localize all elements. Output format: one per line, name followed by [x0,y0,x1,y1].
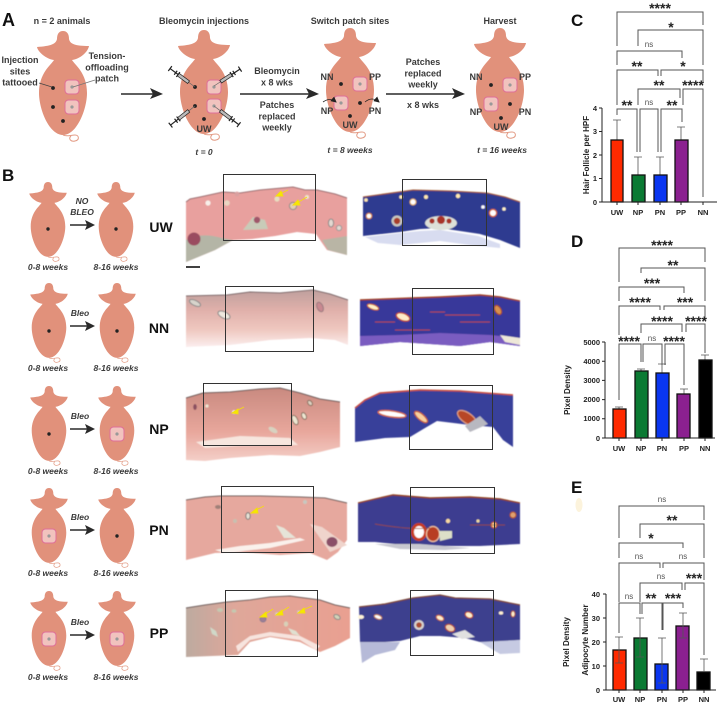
significance brackets: ns [657,572,665,581]
significance brackets: * [648,530,654,546]
animal 4 at harvest [474,28,526,138]
row PP schematic [28,591,139,682]
significance brackets: * [680,58,686,74]
y tick labels [583,338,600,443]
panel B: treatment groups and histology [2,166,520,682]
row label NN: NN [149,320,169,336]
label: patches replaced weekly: weekly [407,80,438,90]
yellow arrow PN [251,506,264,513]
field box [410,386,492,450]
x labels: UW [611,208,624,217]
label: t = 0: t = 0 [195,147,213,157]
yellow arrows UW [276,190,307,205]
y tick labels: 4 [593,104,598,113]
label: tension-offloading patch: offloading [85,62,129,72]
arrow: to injections [121,93,157,95]
label: patches replaced weekly: weekly [261,123,292,133]
x labels [613,695,709,703]
significance brackets: ** [646,590,657,606]
site labels at t = 16 weeks [470,72,531,132]
error bars [615,355,709,409]
y axis title: Hair Follicle per HPF [582,116,591,194]
field box [226,590,318,656]
y tick labels: 10 [592,662,600,671]
y tick labels: 5000 [583,338,600,347]
histology NP trichrome [355,390,513,447]
row label UW: UW [149,219,173,235]
label: patches replaced weekly: replaced [258,111,296,121]
y tick labels: 1000 [583,414,600,423]
field box [226,286,314,352]
y tick labels [593,104,598,207]
histology PP H&E [186,596,350,657]
significance brackets: **** [685,313,707,329]
site labels at t = 8 weeks: PN [369,106,381,116]
field box [412,288,494,354]
bars [613,626,710,690]
significance brackets: **** [649,0,671,16]
significance brackets: ns [635,552,643,561]
x labels: PN [657,444,667,453]
significance brackets: **** [629,294,651,310]
arrow: bleomycin weeks [240,93,312,95]
significance brackets: *** [686,570,703,586]
row UW schematic: NO [76,196,89,206]
significance brackets: * [668,19,674,35]
panel letter A: A [2,10,15,30]
x labels [613,444,710,453]
site labels at t = 8 weeks [320,72,381,130]
site labels at t = 16 weeks: NP [470,107,482,117]
significance brackets: **** [663,333,685,349]
row PN schematic [28,488,139,578]
y tick labels: 20 [592,638,600,647]
y tick labels: 30 [592,614,600,623]
significance brackets: ns [645,98,653,107]
row label NP: NP [149,421,169,437]
site labels at t = 8 weeks: UW [342,120,358,130]
label: t = 8 weeks: t = 8 weeks [327,145,373,155]
row PN schematic: 8-16 weeks [94,568,139,578]
histology PP trichrome [358,595,520,663]
panel E: adipocyte number bar chart [562,478,716,703]
y axis title: Pixel Density [563,365,572,415]
row UW schematic [28,182,139,272]
significance brackets: ns [658,495,666,504]
x labels: NP [636,444,646,453]
x labels: PP [676,208,686,217]
x labels [611,208,708,217]
significance brackets: *** [665,590,682,606]
row NP schematic: Bleo [71,411,89,421]
x labels: PP [679,444,689,453]
significance brackets: **** [651,237,673,253]
label: bleomycin x 8 wks: x 8 wks [261,77,293,87]
y tick labels: 0 [593,198,597,207]
histology NN trichrome [360,295,520,346]
label: injection sites tattooed: sites [10,66,30,76]
yellow arrows PP [260,606,312,617]
histology NN H&E [186,290,348,347]
y tick labels: 4000 [583,357,600,366]
row PN schematic: 0-8 weeks [28,568,68,578]
site labels at t = 8 weeks: PP [369,72,381,82]
significance brackets: ** [667,97,678,113]
axes and ticks [603,594,716,693]
row PN schematic: Bleo [71,512,89,522]
panel letter C: C [571,11,583,30]
field box [410,590,494,656]
label: injection sites tattooed: tattooed [2,78,38,88]
row UW schematic: 8-16 weeks [94,262,139,272]
panel letter E: E [571,478,582,497]
histology UW H&E [186,187,347,262]
error bars [613,120,685,175]
site labels at t = 8 weeks: NP [321,106,333,116]
y tick labels: 0 [596,434,600,443]
label: patches replaced weekly: Patches [406,57,440,67]
significance brackets: ns [645,40,653,49]
y axis title 1: Pixel Density [562,617,571,667]
site labels at t = 16 weeks: UW [494,122,509,132]
heading: Bleomycin injections: Bleomycin injections [159,16,249,26]
row PP schematic: Bleo [71,617,89,627]
arrow: to harvest [386,93,458,95]
y tick labels: 3000 [583,376,600,385]
bars [613,360,712,438]
significance brackets: ** [667,512,678,528]
x labels: NN [698,208,708,217]
row UW schematic: 0-8 weeks [28,262,68,272]
significance brackets [618,237,707,400]
label: tension-offloading patch: Tension- [89,51,125,61]
x labels: NP [633,208,643,217]
row NP schematic: 8-16 weeks [94,466,139,476]
panel A: experimental timeline [1,10,531,157]
row NN schematic: Bleo [71,308,89,318]
row UW schematic: BLEO [70,207,94,217]
label: t = 16 weeks: t = 16 weeks [477,145,527,155]
row NN schematic: 8-16 weeks [94,363,139,373]
site labels at t = 16 weeks: PN [519,107,531,117]
field box [402,180,486,246]
significance brackets: **** [618,333,640,349]
scale bar [186,266,200,268]
significance brackets: *** [677,294,694,310]
y tick labels: 2000 [583,395,600,404]
significance brackets: **** [651,313,673,329]
histology NP H&E [186,388,340,461]
x labels: PN [655,208,665,217]
error bars [615,613,708,683]
heading: n = 2 animals: n = 2 animals [34,16,90,26]
label: injection sites tattooed: Injection [1,55,39,65]
heading: Switch patch sites: Switch patch sites [311,16,389,26]
site labels at t = 16 weeks: NN [470,72,482,82]
y axis title 2: Adipocyte Number [581,604,590,676]
histology UW trichrome [363,190,520,248]
y tick labels: 0 [596,686,600,695]
significance brackets: ** [668,257,679,273]
row NP schematic: 0-8 weeks [28,466,68,476]
bars [611,140,688,202]
significance brackets: ** [622,97,633,113]
label: bleomycin x 8 wks: Bleomycin [254,66,300,76]
faint smudge [576,498,582,512]
x labels: UW [613,444,626,453]
row NN schematic [28,283,139,373]
y tick labels: 40 [592,590,600,599]
label: x 8 wks: x 8 wks [407,100,439,110]
animal 2 with bleomycin syringes [168,30,242,140]
axes and ticks [602,342,715,441]
row label PP: PP [150,625,168,641]
field box [222,486,314,552]
panel letter D: D [571,232,583,251]
label: tension-offloading patch: patch [95,74,119,84]
axes and ticks [599,108,717,205]
significance brackets: ns [648,334,656,343]
row PP schematic: 8-16 weeks [94,672,139,682]
field box [224,174,316,240]
arrowhead [306,88,319,99]
y tick labels: 2 [593,151,597,160]
significance brackets [619,495,704,655]
y tick labels [592,590,600,695]
histology PN trichrome [358,495,520,550]
site labels at t = 16 weeks: PP [519,72,531,82]
arrowhead [150,88,163,99]
significance brackets: ns [625,592,633,601]
row NP schematic [28,386,139,476]
panel letter B: B [2,166,14,185]
x labels: NN [700,444,710,453]
significance brackets: **** [682,77,704,93]
significance brackets: ** [632,58,643,74]
significance brackets: ** [654,77,665,93]
label: patches replaced weekly: Patches [260,100,294,110]
heading: Harvest: Harvest [483,16,517,26]
row label PN: PN [149,522,169,538]
arrowhead [452,88,465,99]
animal 1 with tattooed sites and patches [37,31,95,141]
histology PN H&E [186,496,347,560]
animal 3 with switched patches [323,28,379,138]
y tick labels: 1 [593,174,597,183]
row NN schematic: 0-8 weeks [28,363,68,373]
y tick labels: 3 [593,127,597,136]
field box [204,384,292,446]
row PP schematic: 0-8 weeks [28,672,68,682]
yellow arrow NP [232,407,244,414]
site labels at t = 8 weeks: NN [320,72,334,82]
label: patches replaced weekly: replaced [404,68,442,78]
significance brackets: ns [679,552,687,561]
field box [410,488,494,554]
panel C: hair follicle bar chart [571,0,717,217]
panel D: pixel density bar chart [563,232,715,453]
significance brackets [617,0,704,197]
label: UW: UW [196,124,212,134]
significance brackets: *** [644,275,661,291]
